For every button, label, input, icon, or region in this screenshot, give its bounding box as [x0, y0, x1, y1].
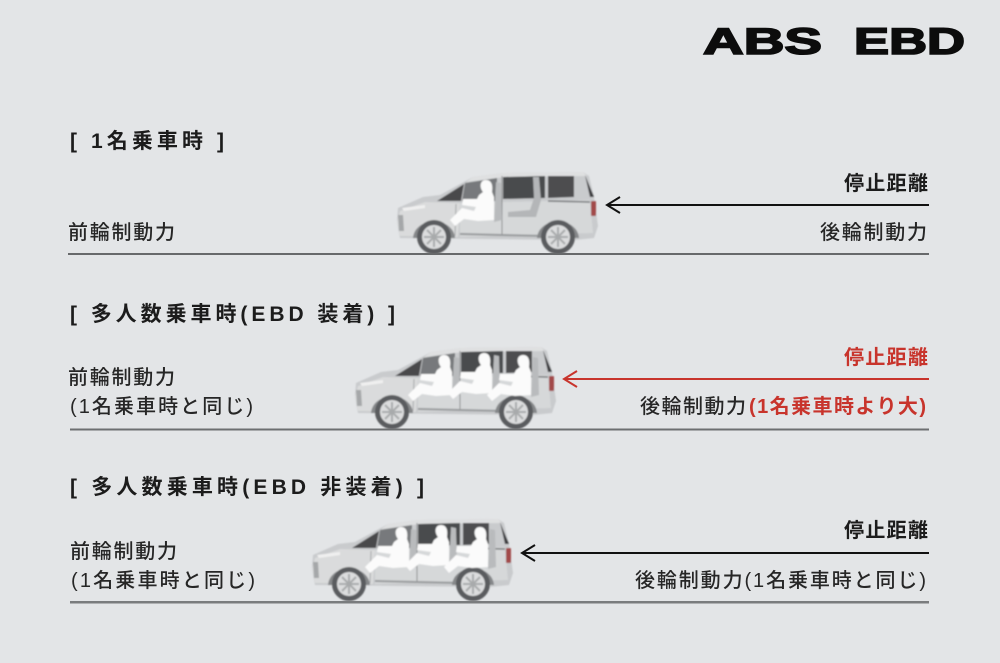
label: stopping distance, red: 停止距離: [844, 346, 928, 369]
car with three occupants: [355, 347, 556, 429]
label: rear brake force: 後輪制動力: [820, 221, 927, 244]
panel: single occupant: [68, 130, 929, 255]
ground line: [70, 601, 929, 604]
label: front brake force: 前輪制動力: [70, 540, 177, 563]
car with three occupants: [312, 519, 513, 601]
note: same as single occupant: (1名乗車時と同じ): [70, 395, 253, 418]
panel: multiple occupants with EBD: [68, 303, 929, 430]
arrow: stopping distance: [607, 197, 929, 213]
arrow: stopping distance: [522, 545, 929, 561]
label: rear brake force: 後輪制動力: [640, 395, 746, 418]
label: rear brake force, same as single occupant: 後輪制動力(1名乗車時と同じ): [635, 569, 926, 592]
logo: ABS EBD: ABS: [703, 21, 822, 62]
heading: single occupant: [ 1名乗車時 ]: [70, 130, 224, 153]
arrow: stopping distance, red: [564, 371, 929, 387]
logo: ABS EBD: [703, 21, 965, 62]
panel: multiple occupants without EBD: [70, 476, 929, 604]
label: front brake force: 前輪制動力: [68, 221, 175, 244]
ground line: [70, 428, 929, 430]
note: greater than single occupant: (1名乗車時より大): [749, 395, 926, 418]
heading: with EBD: [ 多人数乗車時(EBD 装着) ]: [70, 303, 395, 326]
car with driver: [397, 172, 598, 254]
label: front brake force: 前輪制動力: [68, 366, 175, 389]
note: same as single occupant: (1名乗車時と同じ): [71, 569, 255, 592]
label: stopping distance: 停止距離: [844, 519, 928, 542]
heading: without EBD: [ 多人数乗車時(EBD 非装着) ]: [70, 476, 424, 499]
label: stopping distance: 停止距離: [844, 172, 928, 195]
logo: ABS EBD: EBD: [854, 21, 965, 62]
ground line: [68, 253, 929, 255]
